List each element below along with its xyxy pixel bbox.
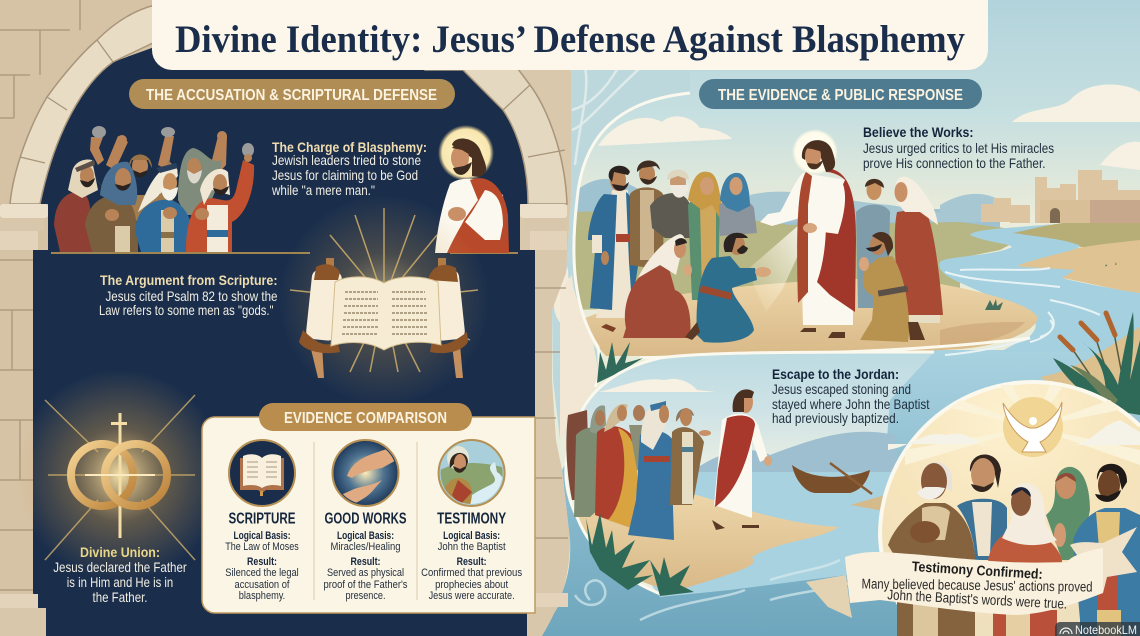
column: scripture: Result: xyxy=(247,556,277,568)
column: testimony: TESTIMONY xyxy=(437,510,507,528)
text: the argument from scripture xyxy=(99,272,278,318)
scene: Escape to the Jordan xyxy=(566,352,934,620)
rollers xyxy=(326,258,446,272)
text: escape to the Jordan xyxy=(772,366,930,426)
rocks in raised hands xyxy=(92,126,254,217)
text: the charge of blasphemy: Jesus for claiming to be God xyxy=(272,167,418,183)
text: the charge of blasphemy: Jewish leaders tried to stone xyxy=(272,152,421,168)
icon: open book xyxy=(240,454,284,496)
column: good works: GOOD WORKS xyxy=(324,510,406,528)
scene: reeds and right bank xyxy=(1040,312,1140,415)
text: divine union: Divine Union: xyxy=(80,544,160,560)
figure: woman in red robe with white scarf xyxy=(894,177,943,323)
group of followers xyxy=(566,401,711,540)
banner heading: Testimony Confirmed: xyxy=(911,558,1043,582)
figure: man in blue robe xyxy=(588,166,642,332)
column: testimony: prophecies about xyxy=(435,579,508,591)
heading pill: the evidence and public response xyxy=(699,79,982,109)
heading pill: evidence comparison xyxy=(259,403,472,431)
text: divine union: the Father. xyxy=(92,589,148,605)
figure: woman in blue scarf xyxy=(719,173,757,236)
mountains xyxy=(690,432,900,480)
figure: man on right in blue xyxy=(1073,464,1140,636)
column: testimony: Jesus were accurate. xyxy=(429,590,515,602)
illustration: angry crowd with stones xyxy=(54,126,254,253)
figure: old man in grey robe xyxy=(650,170,690,238)
column: testimony: Result: xyxy=(457,556,487,568)
back figure brown xyxy=(92,160,178,225)
ground line xyxy=(51,252,310,254)
figure: woman in green xyxy=(688,172,724,300)
column: testimony xyxy=(421,440,523,602)
figure: Jesus walking xyxy=(712,389,772,530)
cloud xyxy=(598,379,716,392)
figure: kneeling man xyxy=(685,233,771,343)
column: scripture xyxy=(225,440,299,602)
title xyxy=(152,0,988,70)
figure: kneeling man in yellow xyxy=(859,232,925,342)
figure: Jesus with halo xyxy=(760,129,856,338)
text: believe the works: Believe the Works: xyxy=(863,124,974,140)
panel: right landscape background xyxy=(540,0,1140,636)
figure: woman in green scarf xyxy=(1046,467,1090,560)
text: divine union: is in Him and He is in xyxy=(67,574,173,590)
heading pill: the accusation and scriptural defense xyxy=(129,79,455,109)
arch and wall seams xyxy=(0,0,568,590)
red and white robed man xyxy=(186,160,254,252)
swirl in water xyxy=(575,560,880,620)
text: the charge of blasphemy: The Charge of Blasphemy: xyxy=(272,139,427,155)
left edge swoosh and vine xyxy=(552,68,690,440)
text: believe the works: prove His connection to the Father. xyxy=(863,155,1046,171)
column: scripture: Logical Basis: xyxy=(234,530,290,542)
clouds xyxy=(598,84,1140,170)
sand bank: scene one xyxy=(585,278,1038,356)
scene: Testimony Confirmed circle xyxy=(806,382,1140,636)
column bases xyxy=(0,594,38,608)
figure: child in grey xyxy=(856,179,890,308)
column: good works: Miracles/Healing xyxy=(330,541,400,553)
red robed man xyxy=(54,191,92,252)
small sandbar xyxy=(850,493,892,512)
text: the argument from scripture: Jesus cited Psalm 82 to show the xyxy=(106,288,278,304)
lake xyxy=(620,472,900,597)
text: divine union: Jesus declared the Father xyxy=(53,559,187,575)
frame arc xyxy=(566,352,934,595)
figure: kneeling woman xyxy=(623,234,692,338)
column: scripture: blasphemy. xyxy=(239,590,285,602)
heading pill: the accusation and scriptural defense: THE ACCUSATION & SCRIPTURAL DEFENSE xyxy=(146,87,437,104)
right hillside bank xyxy=(1062,262,1140,293)
heading pill: evidence comparison: EVIDENCE COMPARISON xyxy=(284,410,447,427)
panel: evidence comparison xyxy=(202,403,535,613)
text: the charge of blasphemy: while "a mere man." xyxy=(271,182,375,198)
banner scroll xyxy=(806,527,1137,618)
column: scripture: The Law of Moses xyxy=(225,541,299,553)
distant hills xyxy=(571,179,1140,310)
icon: dove xyxy=(1003,397,1063,457)
left panel: navy background xyxy=(0,0,572,636)
arch voussoirs xyxy=(10,5,155,204)
text: escape to the Jordan: had previously baptized. xyxy=(772,410,899,426)
text: the argument from scripture: Law refers to some men as "gods." xyxy=(99,302,274,318)
icon: interlocked golden rings with cross xyxy=(15,370,225,580)
icon: glowing scroll and open book xyxy=(279,195,489,405)
back figure grey hood xyxy=(178,148,222,215)
light beam xyxy=(747,218,812,312)
river: upper bend xyxy=(939,224,1140,352)
text: escape to the Jordan: Jesus escaped stoning and xyxy=(772,381,911,397)
text: believe the works: Jesus urged critics to let His miracles xyxy=(863,140,1054,156)
sand shore xyxy=(577,495,839,590)
grass tuft xyxy=(985,262,1130,310)
stone arch and pillars xyxy=(0,0,571,636)
column: good works: proof of the Father's xyxy=(324,579,408,591)
column: scripture: SCRIPTURE xyxy=(228,510,296,528)
blue robed old man xyxy=(135,200,195,252)
raised arms xyxy=(90,136,227,185)
text: escape to the Jordan: stayed where John the Baptist xyxy=(772,396,930,412)
column: scripture: accusation of xyxy=(234,579,290,591)
figure: man in brown robe xyxy=(630,160,664,270)
text: the argument from scripture: The Argument from Scripture: xyxy=(100,272,278,288)
text: divine union xyxy=(53,544,187,605)
plant: scene one xyxy=(597,342,643,383)
icon: reaching hands xyxy=(342,450,394,502)
text: the charge of blasphemy xyxy=(271,139,427,198)
text: believe the works xyxy=(863,124,1054,171)
banner line one: Many believed because Jesus' actions proved xyxy=(861,575,1093,595)
plants: scene two xyxy=(586,513,694,596)
figure: bearded man in blue xyxy=(957,454,1007,560)
column: testimony: Logical Basis: xyxy=(443,530,500,542)
column: testimony: Confirmed that previous xyxy=(421,567,523,579)
heading pill: the evidence and public response: THE EVIDENCE & PUBLIC RESPONSE xyxy=(718,87,963,104)
book pages xyxy=(331,277,441,350)
column: scripture: Silenced the legal xyxy=(225,567,299,579)
figure: Jesus with halo (left) xyxy=(435,125,509,253)
column: good works xyxy=(324,440,408,602)
figure: old man with white beard xyxy=(888,462,975,636)
scene: Believe the Works xyxy=(588,129,943,383)
figure: woman in white scarf xyxy=(988,483,1062,636)
brown robed man xyxy=(85,195,138,252)
column: good works: Served as physical xyxy=(327,567,404,579)
column: testimony: John the Baptist xyxy=(438,541,506,553)
column: good works: Result: xyxy=(350,556,380,568)
sun rays and clouds xyxy=(905,385,1140,465)
banner line two: John the Baptist's words were true. xyxy=(887,586,1068,612)
distant city xyxy=(981,170,1140,223)
column: good works: Logical Basis: xyxy=(337,530,394,542)
column: good works: presence. xyxy=(346,590,386,602)
icon: John the Baptist by river xyxy=(440,446,503,504)
boat xyxy=(792,463,872,494)
capitals xyxy=(0,204,48,218)
title: Divine Identity: Jesus’ Defense Against Blasphemy xyxy=(175,18,965,61)
text: escape to the Jordan: Escape to the Jordan: xyxy=(772,366,899,382)
